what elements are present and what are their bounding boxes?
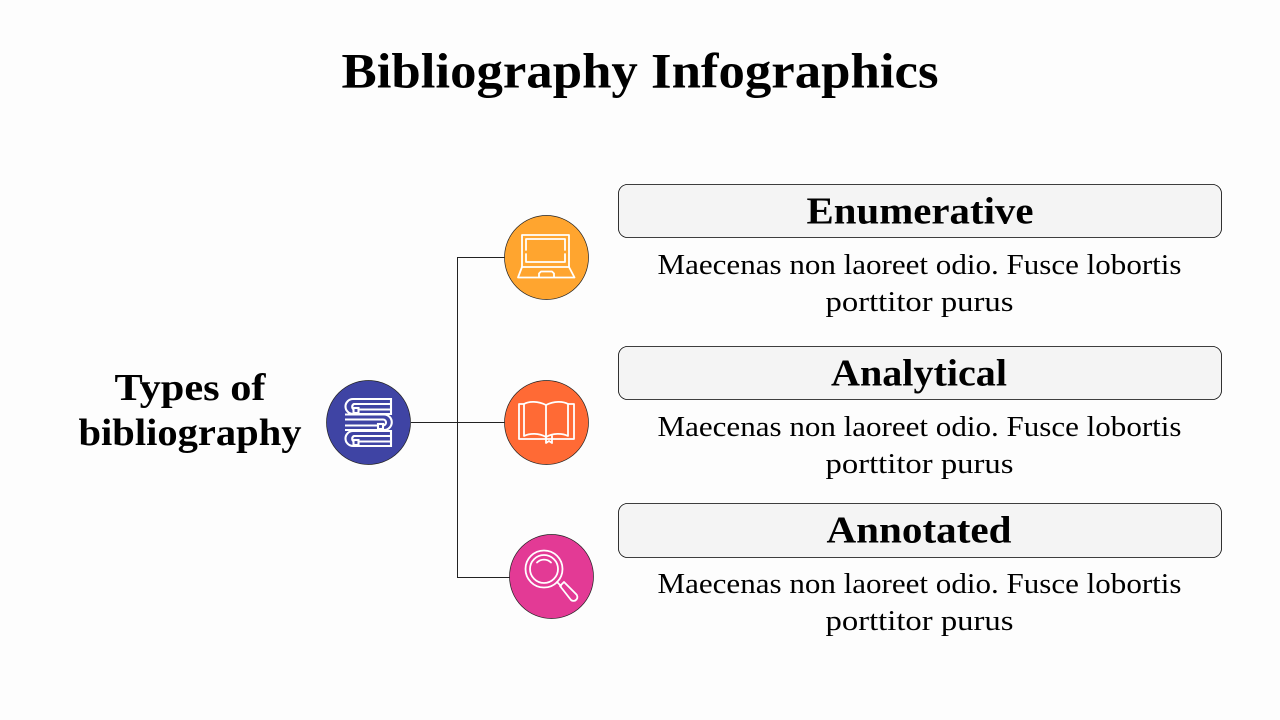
heading: analytical: Analytical <box>831 352 1007 394</box>
panel: analytical <box>618 346 1222 480</box>
text block: annotated description: Maecenas non laoreet odio. Fusce lobortis <box>658 569 1182 600</box>
text block: analytical description: porttitor purus <box>826 449 1014 480</box>
title: Bibliography Infographics <box>342 42 938 98</box>
heading: annotated: Annotated <box>826 510 1012 552</box>
text block: enumerative description: porttitor purus <box>826 287 1014 318</box>
node: laptop icon <box>504 216 588 300</box>
text block: enumerative description: Maecenas non laoreet odio. Fusce lobortis <box>658 250 1182 281</box>
text block: annotated description <box>658 569 1182 637</box>
connector lines <box>411 258 510 578</box>
text block: annotated description: porttitor purus <box>826 606 1014 637</box>
heading: analytical <box>618 346 1222 400</box>
left label: types of bibliography <box>78 367 302 454</box>
heading: enumerative <box>618 184 1222 238</box>
text block: analytical description <box>658 412 1182 480</box>
left label: types of bibliography: bibliography <box>78 412 302 454</box>
node: magnifier icon <box>510 534 594 618</box>
heading: enumerative: Enumerative <box>806 190 1034 232</box>
panel: annotated <box>618 504 1222 637</box>
left label: types of bibliography: Types of <box>114 367 267 409</box>
text block: analytical description: Maecenas non laoreet odio. Fusce lobortis <box>658 412 1182 443</box>
node: open book icon <box>504 380 588 464</box>
panel: enumerative <box>618 184 1222 318</box>
text block: enumerative description <box>658 250 1182 318</box>
central node: stacked books icon <box>326 380 410 464</box>
heading: annotated <box>618 504 1222 558</box>
